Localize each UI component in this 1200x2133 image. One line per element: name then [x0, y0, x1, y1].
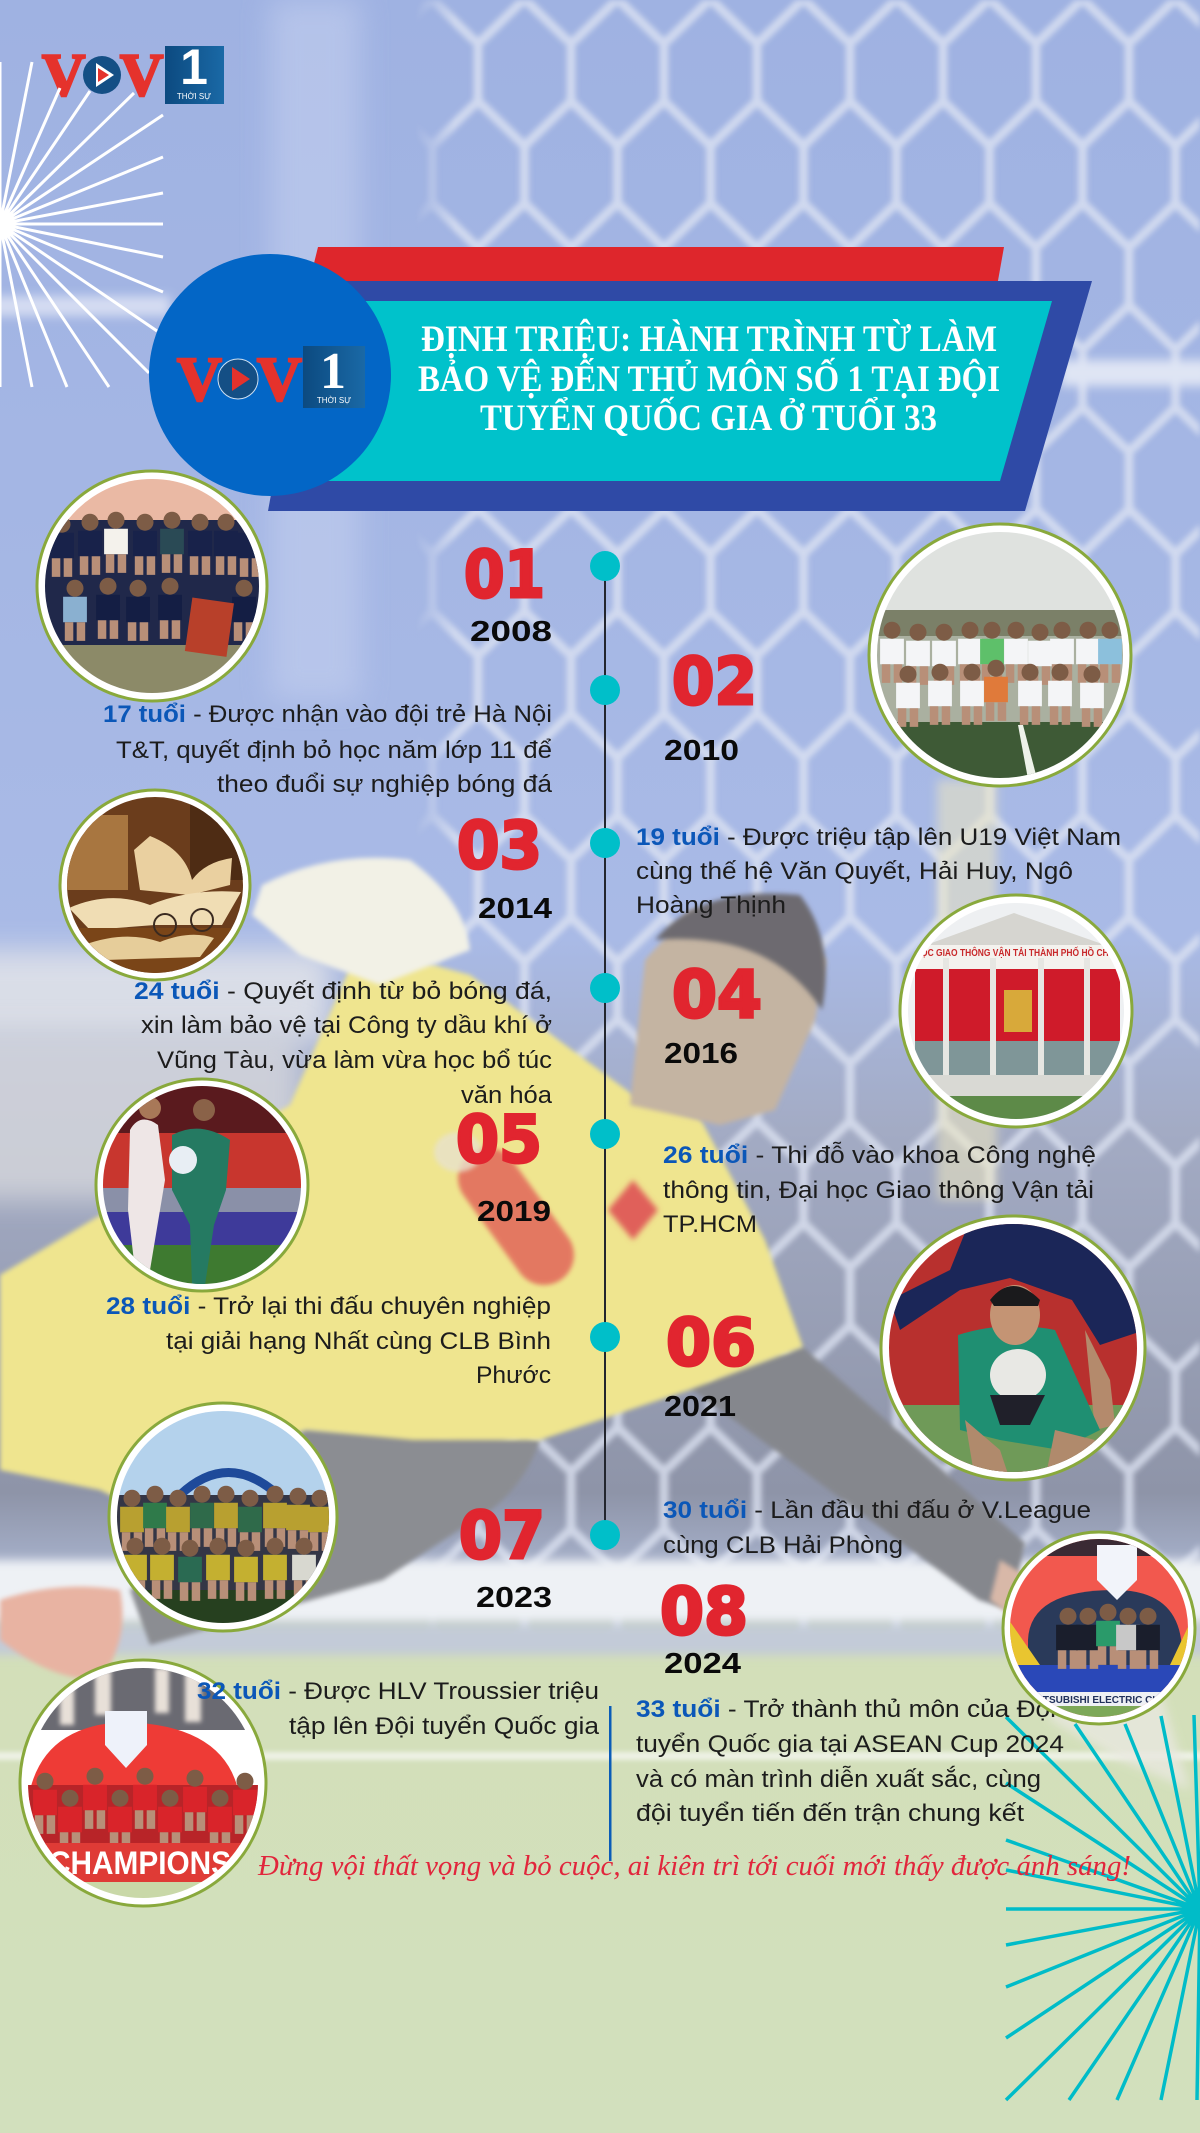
- text: 33 tuổi: và có màn trình diễn xuất sắc, cùng: [636, 1766, 1041, 1793]
- logo disc: THỜI SỰ: [317, 396, 351, 405]
- year 02: 2010: [664, 735, 739, 767]
- photo 8: award ceremony: MITSUBISHI ELECTRIC CUP: [1032, 1695, 1167, 1706]
- logo: VOV1 top left: [42, 39, 224, 108]
- text: 19 tuổi: 19 tuổi - Được triệu tập lên U19 Việt Nam: [636, 824, 1121, 851]
- text: 28 tuổi: 28 tuổi - Trở lại thi đấu chuyên nghiệp: [106, 1293, 551, 1320]
- year 07: 07: [459, 1499, 545, 1574]
- year 01: 2008: [470, 616, 552, 648]
- text: 19 tuổi: Hoàng Thịnh: [636, 892, 786, 919]
- title text: [418, 318, 1000, 439]
- timeline axis with dots: [590, 551, 620, 1550]
- text: 30 tuổi: 30 tuổi - Lần đầu thi đấu ở V.League: [663, 1497, 1091, 1524]
- text: 30 tuổi: [663, 1497, 1091, 1559]
- photo 4: university building: ỌC GIAO THÔNG VẬN TẢI THÀNH PHỐ HỒ CHÍ: [921, 945, 1111, 959]
- year 07: 2023: [476, 1582, 552, 1614]
- title text: TUYỂN QUỐC GIA Ở TUỔI 33: [480, 395, 937, 439]
- photo 9: ASEAN Cup champions: [20, 1660, 266, 1907]
- text: 32 tuổi: tập lên Đội tuyển Quốc gia: [289, 1713, 600, 1740]
- text: 17 tuổi: 17 tuổi - Được nhận vào đội trẻ Hà Nội: [103, 701, 552, 728]
- text: 24 tuổi: Vũng Tàu, vừa làm vừa học bổ túc: [157, 1047, 552, 1074]
- photo 6: goalkeeper diving: [881, 1215, 1145, 1490]
- year 01: 01: [464, 538, 545, 613]
- text: 19 tuổi: [636, 824, 1121, 919]
- logo: VOV1 top left: THỜI SỰ: [177, 92, 211, 101]
- text: 26 tuổi: TP.HCM: [663, 1211, 757, 1238]
- text: 33 tuổi: 33 tuổi - Trở thành thủ môn của Đội: [636, 1696, 1056, 1723]
- year 05: [456, 1103, 551, 1228]
- year 08: 08: [660, 1575, 748, 1650]
- photo 4: university building: [899, 894, 1133, 1130]
- year 08: 2024: [664, 1648, 741, 1680]
- logo: VOV1 top left: V: [120, 42, 163, 108]
- text: 33 tuổi: [636, 1696, 1064, 1827]
- logo disc: V: [257, 346, 302, 414]
- title banner: [268, 247, 1092, 511]
- year 02: [664, 645, 757, 767]
- text: 26 tuổi: [663, 1142, 1096, 1238]
- title text: BẢO VỆ ĐẾN THỦ MÔN SỐ 1 TẠI ĐỘI: [418, 356, 1000, 400]
- year 01: [464, 538, 552, 648]
- year 05: 2019: [477, 1196, 551, 1228]
- photo 5: match with ball: [96, 1078, 308, 1295]
- year 04: [664, 958, 762, 1070]
- photo 7: Binh Phuoc team: [109, 1403, 337, 1635]
- text: 30 tuổi: cùng CLB Hải Phòng: [663, 1532, 903, 1559]
- text: 32 tuổi: 32 tuổi - Được HLV Troussier triệu: [197, 1678, 599, 1705]
- text: 28 tuổi: Phước: [476, 1362, 551, 1389]
- year 05: 05: [456, 1103, 542, 1178]
- text: 33 tuổi: tuyển Quốc gia tại ASEAN Cup 2024: [636, 1731, 1064, 1758]
- text: 19 tuổi: cùng thế hệ Văn Quyết, Hải Huy, Ngô: [636, 858, 1073, 885]
- year 04: 04: [672, 958, 762, 1033]
- year 06: [664, 1306, 756, 1423]
- text: 17 tuổi: [103, 701, 553, 798]
- year 06: 2021: [664, 1391, 736, 1423]
- logo disc: [149, 254, 391, 496]
- text: 24 tuổi: 24 tuổi - Quyết định từ bỏ bóng đá,: [134, 978, 552, 1005]
- photo 3: books: [60, 790, 250, 990]
- decoration: white sunburst: [0, 62, 163, 387]
- text: 28 tuổi: [106, 1293, 551, 1389]
- text: 32 tuổi: [197, 1678, 600, 1740]
- text: 17 tuổi: theo đuổi sự nghiệp bóng đá: [217, 771, 553, 798]
- photo 8: award ceremony: [1002, 1532, 1196, 1728]
- title text: ĐỊNH TRIỆU: HÀNH TRÌNH TỪ LÀM: [421, 318, 997, 360]
- divider line 2024: [609, 1706, 612, 1861]
- text: 26 tuổi: thông tin, Đại học Giao thông Vận tải: [663, 1177, 1094, 1204]
- text: 26 tuổi: 26 tuổi - Thi đỗ vào khoa Công nghệ: [663, 1142, 1096, 1169]
- text: 24 tuổi: văn hóa: [461, 1082, 553, 1109]
- year 06: 06: [666, 1306, 756, 1381]
- photo 2: U19 team 2010: [868, 524, 1132, 790]
- text: 24 tuổi: [134, 978, 553, 1109]
- year 04: 2016: [664, 1038, 738, 1070]
- closing quote: Đừng vội thất vọng và bỏ cuộc, ai kiên trì tới cuối mới thấy được ánh sáng!: [257, 1851, 1131, 1882]
- text: 17 tuổi: T&T, quyết định bỏ học năm lớp 11 để: [116, 737, 552, 764]
- logo disc: V: [177, 346, 222, 414]
- year 07: [459, 1499, 552, 1614]
- year 03: 03: [457, 809, 542, 884]
- logo: VOV1 top left: 1: [180, 39, 208, 95]
- year 02: 02: [672, 645, 757, 720]
- logo disc: 1: [320, 343, 346, 400]
- decoration: teal sunburst: [1006, 1715, 1200, 2100]
- logo: VOV1 top left: V: [42, 42, 85, 108]
- text: 33 tuổi: đội tuyển tiến đến trận chung kết: [636, 1800, 1024, 1827]
- photo 1: youth team 2008: [37, 470, 270, 701]
- text: 24 tuổi: xin làm bảo vệ tại Công ty dầu khí ở: [141, 1012, 552, 1039]
- year 03: 2014: [478, 893, 552, 925]
- year 03: [457, 809, 552, 925]
- photo 9: ASEAN Cup champions: CHAMPIONS: [49, 1845, 231, 1881]
- text: 28 tuổi: tại giải hạng Nhất cùng CLB Bình: [166, 1328, 551, 1355]
